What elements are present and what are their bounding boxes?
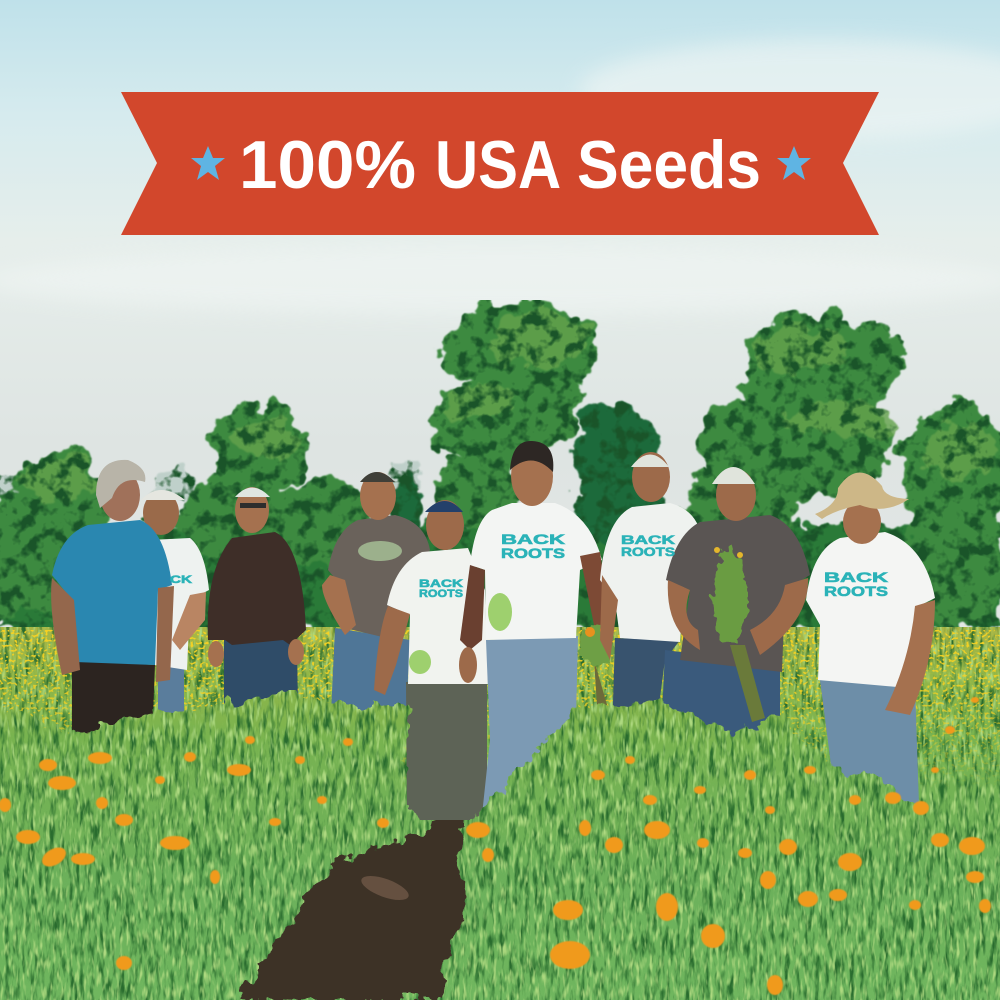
shirt logos: CK — [170, 574, 192, 586]
person 4: grey tee — [322, 472, 430, 735]
banner title: Seeds — [577, 127, 761, 203]
dirt path — [228, 800, 476, 1000]
person 8: grey tee holding plant — [660, 467, 810, 760]
person 3: dark long sleeve — [208, 487, 306, 725]
shirt logos: BACK — [621, 533, 676, 547]
person 1: blue shirt elder — [51, 460, 174, 770]
flower field — [0, 627, 1000, 1000]
clouds — [0, 40, 1000, 314]
person 7: white shirt, right — [600, 452, 701, 735]
plant bouquet — [713, 547, 765, 722]
shirt logos: ROOTS — [501, 545, 565, 561]
icon: right star — [777, 146, 811, 180]
shirt logos: BACK — [824, 569, 888, 585]
person 2: white shirt behind — [141, 490, 209, 730]
tree line — [0, 300, 1000, 630]
shirt logos: ROOTS — [824, 583, 888, 599]
shirt logos: ROOTS — [621, 545, 675, 559]
sky background — [0, 0, 1000, 640]
banner title: USA — [435, 127, 560, 203]
yellow flowers far band — [0, 630, 1000, 790]
shirt logos — [170, 531, 888, 600]
flower bouquet — [578, 625, 616, 720]
banner — [121, 92, 879, 235]
people — [51, 441, 935, 835]
orange poppies — [0, 697, 991, 995]
person 9: straw hat — [806, 472, 935, 835]
banner ribbon — [121, 92, 879, 235]
banner title: 100% — [239, 127, 416, 203]
person 6: central man — [459, 441, 610, 822]
person 5: white shirt, navy cap — [374, 500, 488, 820]
foreground grass — [0, 690, 1000, 1000]
shirt logos: BACK — [419, 578, 463, 590]
clod — [358, 871, 412, 905]
shirt logos: ROOTS — [419, 588, 463, 600]
icon: left star — [191, 146, 225, 180]
shirt logos: BACK — [501, 531, 565, 547]
